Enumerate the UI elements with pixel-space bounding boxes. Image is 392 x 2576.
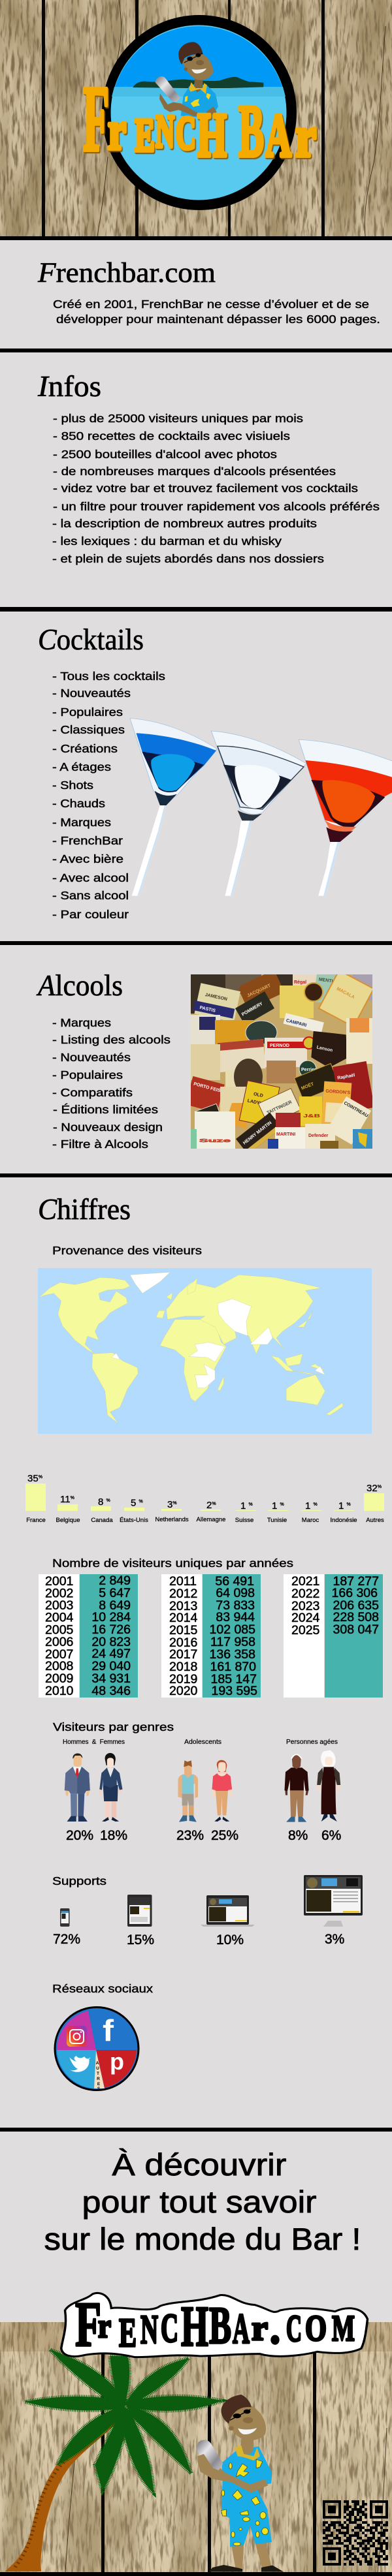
heading: Cocktails: Cocktails (38, 623, 144, 656)
image: collage of alcohol labels: PASTIS (199, 1006, 216, 1014)
list: infos: - plus de 25000 visiteurs uniques par mois (53, 412, 303, 425)
values: share by device: 72% (53, 1932, 80, 1947)
label: autres: S (97, 2087, 101, 2091)
table: visitors 2011-2020: 2011 (169, 1574, 197, 1589)
table: visitors 2011-2020: 2018 (169, 1660, 197, 1674)
logo wordmark: French Bar: F (83, 67, 109, 171)
list: alcools: - Nouveautés (52, 1051, 131, 1064)
table: visitors 2021-2025: 187 277 (333, 1574, 379, 1589)
icon: teen boy (178, 1760, 198, 1822)
table: visitors 2001-2010: 8 649 (99, 1598, 131, 1613)
list: cocktails: - Créations (52, 742, 118, 755)
logo wordmark: French Bar: B (238, 89, 264, 172)
banner text: FrenchBar.com: M (332, 2308, 355, 2349)
heading: Infos: Infos (37, 370, 101, 403)
table: visitors 2021-2025: 166 306 (332, 1586, 378, 1600)
image: collage of alcohol labels: Suze (199, 1139, 231, 1143)
icon: woman in suit (99, 1753, 122, 1822)
banner text: FrenchBar.com: O (305, 2308, 327, 2349)
banner text: FrenchBar.com: H (181, 2295, 208, 2359)
chart: visitor share by country: % (106, 1498, 110, 1503)
icon: QR code (323, 2502, 388, 2564)
banner text: FrenchBar.com: . (270, 2301, 280, 2353)
image: collage of alcohol labels: GORDON'S (325, 1089, 351, 1095)
table: visitors 2001-2010: 5 647 (99, 1586, 131, 1600)
chart: visitor share by country: Canada (91, 1517, 113, 1524)
values: share by gender and age: 8% (288, 1828, 308, 1843)
chart: visitor share by country: % (347, 1502, 351, 1507)
table: visitors 2021-2025: 2025 (291, 1623, 320, 1637)
list: alcools (52, 1016, 171, 1151)
logo wordmark: French Bar (83, 67, 316, 172)
chart: visitor share by country: Belgique (56, 1517, 80, 1524)
panel: Frenchbar.com intro (37, 258, 380, 326)
image: collage of alcohol labels: HENRY MARTIN (242, 1121, 272, 1145)
table: visitors 2011-2020: 2012 (169, 1587, 197, 1601)
chart: visitor share by country: % (139, 1500, 143, 1504)
logo wordmark: French Bar: H (197, 100, 227, 170)
list: cocktails (52, 670, 165, 921)
image: collage of alcohol labels: LADY'S (247, 1098, 265, 1107)
panel: top wood header with logo (0, 0, 392, 236)
icon: twitter (69, 2056, 91, 2072)
table: visitors 2011-2020: 2013 (169, 1599, 197, 1613)
chart: visitor share by country: 3 (167, 1499, 172, 1510)
list: cocktails: - Classiques (52, 723, 125, 736)
image: collage of alcohol labels: OLD (253, 1092, 263, 1098)
table: visitors 2001-2010: 2007 (45, 1647, 73, 1662)
labels: age groups: Personnes agées (286, 1739, 338, 1746)
values: share by gender and age (66, 1828, 341, 1843)
icon: barman standing (197, 2395, 284, 2572)
icon: island (133, 77, 263, 88)
banner text: FrenchBar.com: A (233, 2305, 250, 2353)
logo wordmark: French Bar: N (155, 105, 174, 157)
chart: visitor share by country: Netherlands (155, 1516, 189, 1523)
table: visitors 2021-2025: 2021 (291, 1574, 319, 1589)
banner: FrenchBar.com (61, 2293, 367, 2357)
image: collage of alcohol labels: Régal (294, 980, 306, 985)
table: visitors 2011-2020: 56 491 (215, 1574, 254, 1589)
list: alcools: - Listing des alcools (52, 1033, 171, 1046)
logo wordmark: French Bar: r (108, 101, 126, 161)
table: visitors 2001-2010: 2008 (45, 1659, 73, 1673)
callout: À découvrir: sur le monde du Bar ! (44, 2222, 361, 2256)
image: collage of alcohol labels (186, 970, 374, 1155)
chart: visitor share by country: 35 (27, 1473, 39, 1484)
table: visitors 2011-2020: 117 958 (210, 1635, 255, 1649)
chart: visitor share by country: 32 (367, 1483, 378, 1494)
panel: Cocktails (38, 623, 392, 921)
icon: facebook: f (103, 2013, 114, 2047)
table: visitors 2011-2020: 73 833 (216, 1598, 255, 1613)
callout: À découvrir: pour tout savoir (82, 2184, 316, 2219)
table: visitors 2001-2010 (39, 1574, 138, 1698)
image: collage of alcohol labels: Defender (308, 1134, 329, 1138)
banner text: FrenchBar.com: r (98, 2308, 111, 2345)
list: infos: - la description de nombreux autres produits (52, 517, 317, 530)
table: visitors 2011-2020 (161, 1574, 261, 1698)
table: visitors 2011-2020: 64 098 (216, 1586, 255, 1600)
icon: desktop monitor (304, 1875, 363, 1927)
chart: visitor share by country: 11 (60, 1494, 71, 1505)
heading: Chiffres: Chiffres (38, 1192, 131, 1226)
chart: visitor share by country: Suisse (235, 1517, 253, 1524)
image: collage of alcohol labels: CAMPARI (286, 1019, 307, 1028)
chart: visitor share by country: États-Unis (120, 1517, 148, 1524)
table: visitors 2001-2010: 2001 (45, 1574, 73, 1589)
banner text: FrenchBar.com: r (252, 2308, 268, 2348)
label: autres: T (97, 2072, 99, 2076)
image: collage of alcohol labels: MARTINI (276, 1132, 295, 1137)
icon: phone (60, 1908, 69, 1927)
heading: Visiteurs par genres: Visiteurs par genres (53, 1720, 174, 1733)
image: collage of alcohol labels: PERNOD (270, 1044, 289, 1048)
banner text: FrenchBar.com: F (75, 2289, 101, 2360)
labels: age groups (63, 1739, 338, 1746)
logo wordmark: French Bar: r (295, 106, 316, 169)
list: infos (52, 412, 380, 565)
table: visitors 2021-2025: 2024 (291, 1611, 320, 1625)
list: infos: - de nombreuses marques d'alcools présentées (53, 465, 336, 478)
list: cocktails: - Populaires (52, 706, 123, 719)
image: collage of alcohol labels: TAITTINGER (267, 1100, 293, 1115)
banner text: FrenchBar.com: C (286, 2307, 302, 2350)
list: cocktails: - Avec bière (52, 852, 123, 865)
values: share by gender and age: 20% (66, 1828, 93, 1843)
icon: blue glass (130, 719, 217, 896)
table: visitors 2001-2010: 2009 (45, 1671, 73, 1686)
table: visitors 2021-2025: 308 047 (333, 1622, 379, 1637)
chart: visitor share by country: % (314, 1502, 318, 1507)
table: visitors 2001-2010: 2004 (45, 1611, 74, 1625)
text: intro (53, 298, 380, 326)
image: collage of alcohol labels: PORTO FEIST (193, 1082, 224, 1094)
banner text: FrenchBar.com (75, 2289, 355, 2360)
icon: instagram (67, 2026, 87, 2047)
heading: Réseaux sociaux: Réseaux sociaux (52, 1982, 153, 1995)
list: alcools: - Filtre à Alcools (52, 1138, 148, 1151)
chart: visitor share by country: 1 (305, 1500, 310, 1512)
banner text: FrenchBar.com: E (119, 2311, 137, 2355)
panel: Infos (37, 370, 380, 565)
icon: laptop (201, 1895, 255, 1927)
table: visitors 2011-2020: 2017 (169, 1647, 197, 1662)
logo wordmark: French Bar: A (265, 102, 291, 170)
list: infos: - les lexiques : du barman et du whisky (52, 535, 282, 548)
list: infos: - 2500 bouteilles d'alcool avec photos (53, 448, 277, 461)
table: visitors 2021-2025: 2022 (291, 1587, 319, 1601)
label: autres: R (97, 2077, 100, 2081)
table: visitors 2011-2020: 2015 (169, 1623, 198, 1637)
list: cocktails: - Par couleur (52, 908, 129, 921)
values: share by gender and age: 18% (100, 1828, 127, 1843)
list: cocktails: - Avec alcool (52, 871, 129, 884)
values: share by device: 10% (216, 1932, 244, 1948)
chart: visitor share by country: 1 (338, 1500, 344, 1512)
table: visitors 2001-2010: 16 726 (91, 1622, 131, 1637)
table: visitors 2011-2020: 136 358 (209, 1647, 255, 1662)
icon: teen girl (212, 1760, 233, 1822)
table: visitors 2021-2025 (284, 1574, 383, 1698)
table: visitors 2011-2020: 2014 (169, 1611, 198, 1625)
chart: visitor share by country: Allemagne (197, 1516, 225, 1523)
heading: Supports: Supports (52, 1874, 106, 1887)
list: cocktails: - FrenchBar (52, 834, 123, 847)
illustration: three cocktail glasses (130, 719, 392, 896)
labels: age groups: Adolescents (184, 1739, 221, 1746)
chart: visitor share by country: Indonésie (330, 1517, 357, 1524)
chart: visitor share by country: France (26, 1517, 46, 1524)
table: visitors 2001-2010: 2002 (45, 1586, 73, 1600)
heading: Nombre de visiteurs uniques par années: Nombre de visiteurs uniques par années (52, 1557, 293, 1570)
icon: pinterest: p (110, 2048, 124, 2075)
list: cocktails: - Shots (52, 779, 93, 792)
values: share by gender and age: 25% (211, 1828, 238, 1843)
chart: visitor share by country: Autres (366, 1517, 384, 1524)
panel: bottom wood footer (0, 2289, 392, 2576)
image: collage of alcohol labels: JACQUART (246, 984, 272, 999)
values: share by device: 15% (127, 1932, 154, 1948)
table: visitors 2011-2020: 193 595 (212, 1684, 257, 1698)
list: cocktails: - Chauds (52, 797, 105, 810)
icon: red glass (299, 739, 392, 896)
table: visitors 2011-2020: 2019 (169, 1672, 197, 1686)
table: visitors 2001-2010: 24 497 (91, 1647, 131, 1661)
table: visitors 2001-2010: 2005 (45, 1622, 74, 1637)
list: cocktails: - Marques (52, 816, 111, 829)
chart: visitor share by country: Maroc (302, 1517, 319, 1524)
image: collage of alcohol labels: Perrier (301, 1068, 316, 1072)
panel: Alcools (36, 969, 374, 1155)
chart: visitor share by country: % (280, 1502, 284, 1507)
chart: visitor share by country: % (378, 1485, 382, 1489)
table: visitors 2021-2025: 2023 (291, 1599, 319, 1613)
banner text: FrenchBar.com: N (140, 2308, 158, 2352)
logo: round badge with barman (83, 15, 316, 210)
table: visitors 2001-2010: 2006 (45, 1635, 73, 1649)
table: visitors 2021-2025: 228 508 (333, 1610, 379, 1624)
heading: Alcools: Alcools (36, 969, 123, 1002)
values: share by gender and age: 6% (321, 1828, 341, 1843)
list: alcools: - Populaires (52, 1068, 123, 1081)
list: infos: - et plein de sujets abordés dans nos dossiers (52, 552, 324, 565)
table: visitors 2011-2020: 2016 (169, 1636, 197, 1650)
table: visitors 2001-2010: 20 823 (91, 1635, 131, 1649)
chart: visitor share by country (25, 1473, 384, 1524)
list: alcools: - Marques (52, 1016, 111, 1029)
heading: Frenchbar.com: Frenchbar.com (37, 258, 216, 288)
logo wordmark: French Bar: C (176, 107, 196, 159)
logo wordmark: French Bar: E (135, 109, 155, 161)
banner text: FrenchBar.com: C (161, 2306, 178, 2351)
values: share by gender and age: 23% (176, 1828, 204, 1843)
values: share by device: 3% (325, 1932, 344, 1947)
chart: visitor share by country: % (212, 1502, 216, 1506)
chart: visitor share by country: Tunisie (267, 1517, 287, 1524)
image: collage of alcohol labels: JAMESON (204, 993, 227, 1002)
image: collage of alcohol labels: Lanson (316, 1045, 333, 1053)
table: visitors 2011-2020: 185 147 (210, 1672, 257, 1686)
panel: Chiffres (25, 1192, 384, 2091)
icon: old man (284, 1754, 309, 1822)
divider bars (0, 236, 392, 2132)
image: collage of alcohol labels: POMMERY (241, 1001, 264, 1017)
list: cocktails: - Nouveautés (52, 687, 131, 700)
chart: social network pie (55, 2008, 139, 2091)
icon: old woman (317, 1750, 340, 1822)
chart: visitor share by country: 2 (206, 1500, 212, 1511)
table: visitors 2001-2010: 2 849 (99, 1574, 131, 1588)
callout: À découvrir: À découvrir (112, 2147, 286, 2182)
labels: age groups: Hommes & Femmes (63, 1739, 125, 1746)
table: visitors 2001-2010: 48 346 (91, 1684, 131, 1698)
table: visitors 2001-2010: 29 040 (91, 1659, 131, 1673)
chart: visitor share by country: % (39, 1475, 42, 1480)
icon: man in suit (65, 1753, 90, 1822)
table: visitors 2011-2020: 83 944 (216, 1610, 255, 1624)
chart: visitor share by country: % (71, 1496, 74, 1500)
list: cocktails: - Sans alcool (52, 889, 129, 902)
list: infos: - videz votre bar et trouvez facilement vos cocktails (53, 482, 358, 495)
chart: visitor share by country: % (172, 1501, 177, 1506)
chart: visitor share by country: % (249, 1502, 253, 1507)
table: visitors 2021-2025: 206 635 (333, 1598, 379, 1613)
table: visitors 2001-2010: 2010 (45, 1684, 74, 1698)
label: autres: A (96, 2061, 99, 2066)
label: autres: E (97, 2082, 101, 2087)
list: infos: - un filtre pour trouver rapidement vos alcools préférés (53, 500, 380, 513)
chart: visitor share by country: 8 (98, 1497, 103, 1508)
image: collage of alcohol labels: J&B (303, 1114, 320, 1119)
icon: white glass (211, 731, 306, 896)
image: collage of alcohol labels: Raphaël (337, 1073, 355, 1081)
icon: tablet (127, 1895, 152, 1927)
callout: À découvrir (44, 2147, 361, 2256)
icons: people figures (65, 1750, 340, 1822)
list: cocktails: - A étages (52, 760, 111, 773)
list: alcools: - Nouveaux design (53, 1121, 163, 1134)
table: visitors 2011-2020: 102 085 (209, 1622, 255, 1637)
image: collage of alcohol labels: COINTREAU (343, 1101, 368, 1119)
table: visitors 2001-2010: 34 931 (91, 1671, 131, 1686)
values: share by device (53, 1932, 344, 1948)
list: cocktails: - Tous les cocktails (52, 670, 165, 683)
image: collage of alcohol labels: MACALA (336, 987, 355, 1000)
icon: barman (155, 42, 218, 117)
table: visitors 2011-2020: 161 870 (210, 1660, 256, 1674)
chart: visitor share by country: 1 (272, 1500, 277, 1512)
table: visitors 2001-2010: 2003 (45, 1598, 73, 1613)
image: collage of alcohol labels: MOËT (301, 1081, 315, 1091)
image: collage of alcohol labels: MENTHE (318, 978, 338, 985)
text: intro: Créé en 2001, FrenchBar ne cesse d’évoluer et de se (53, 298, 369, 311)
heading: Provenance des visiteurs: Provenance des visiteurs (52, 1244, 202, 1257)
list: alcools: - Éditions limitées (53, 1103, 158, 1116)
icon: palm tree (5, 2350, 223, 2571)
chart: visitor share by country: 1 (240, 1500, 246, 1512)
text: intro: développer pour maintenant dépasser les 6000 pages. (56, 313, 380, 326)
chart: world map (38, 1268, 372, 1434)
banner text: FrenchBar.com: B (209, 2297, 231, 2355)
list: infos: - 850 recettes de cocktails avec visiuels (53, 429, 290, 442)
table: visitors 2001-2010: 10 284 (91, 1610, 131, 1624)
list: alcools: - Comparatifs (52, 1086, 133, 1099)
table: visitors 2011-2020: 2020 (169, 1684, 198, 1698)
chart: visitor share by country: 5 (131, 1497, 136, 1509)
label: autres: U (96, 2066, 99, 2071)
